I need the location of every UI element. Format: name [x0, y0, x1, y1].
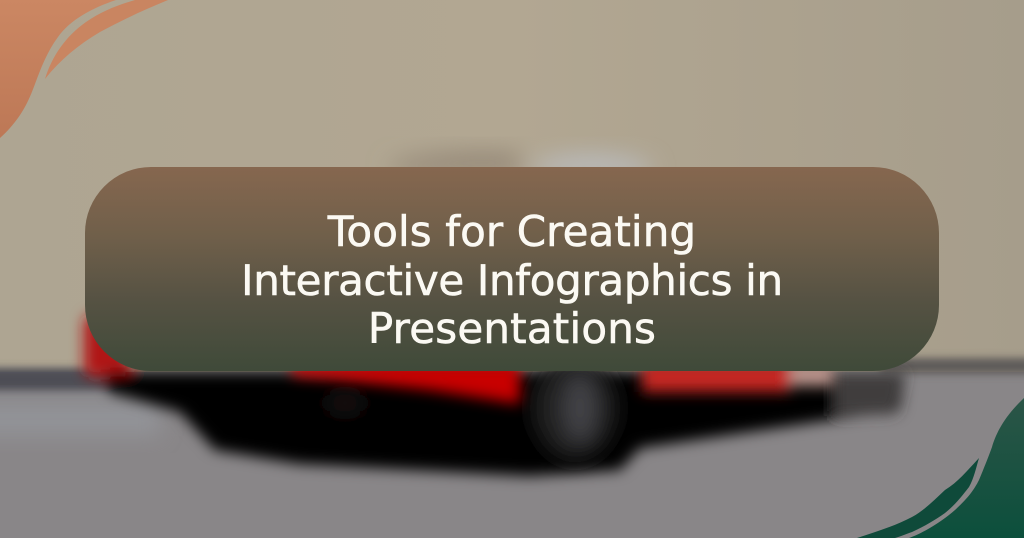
title: Tools for Creating	[328, 207, 696, 256]
title panel: rounded gradient pill	[85, 167, 939, 371]
title: Interactive Infographics in	[241, 256, 783, 304]
title: Presentations	[368, 304, 656, 353]
title	[241, 207, 783, 353]
